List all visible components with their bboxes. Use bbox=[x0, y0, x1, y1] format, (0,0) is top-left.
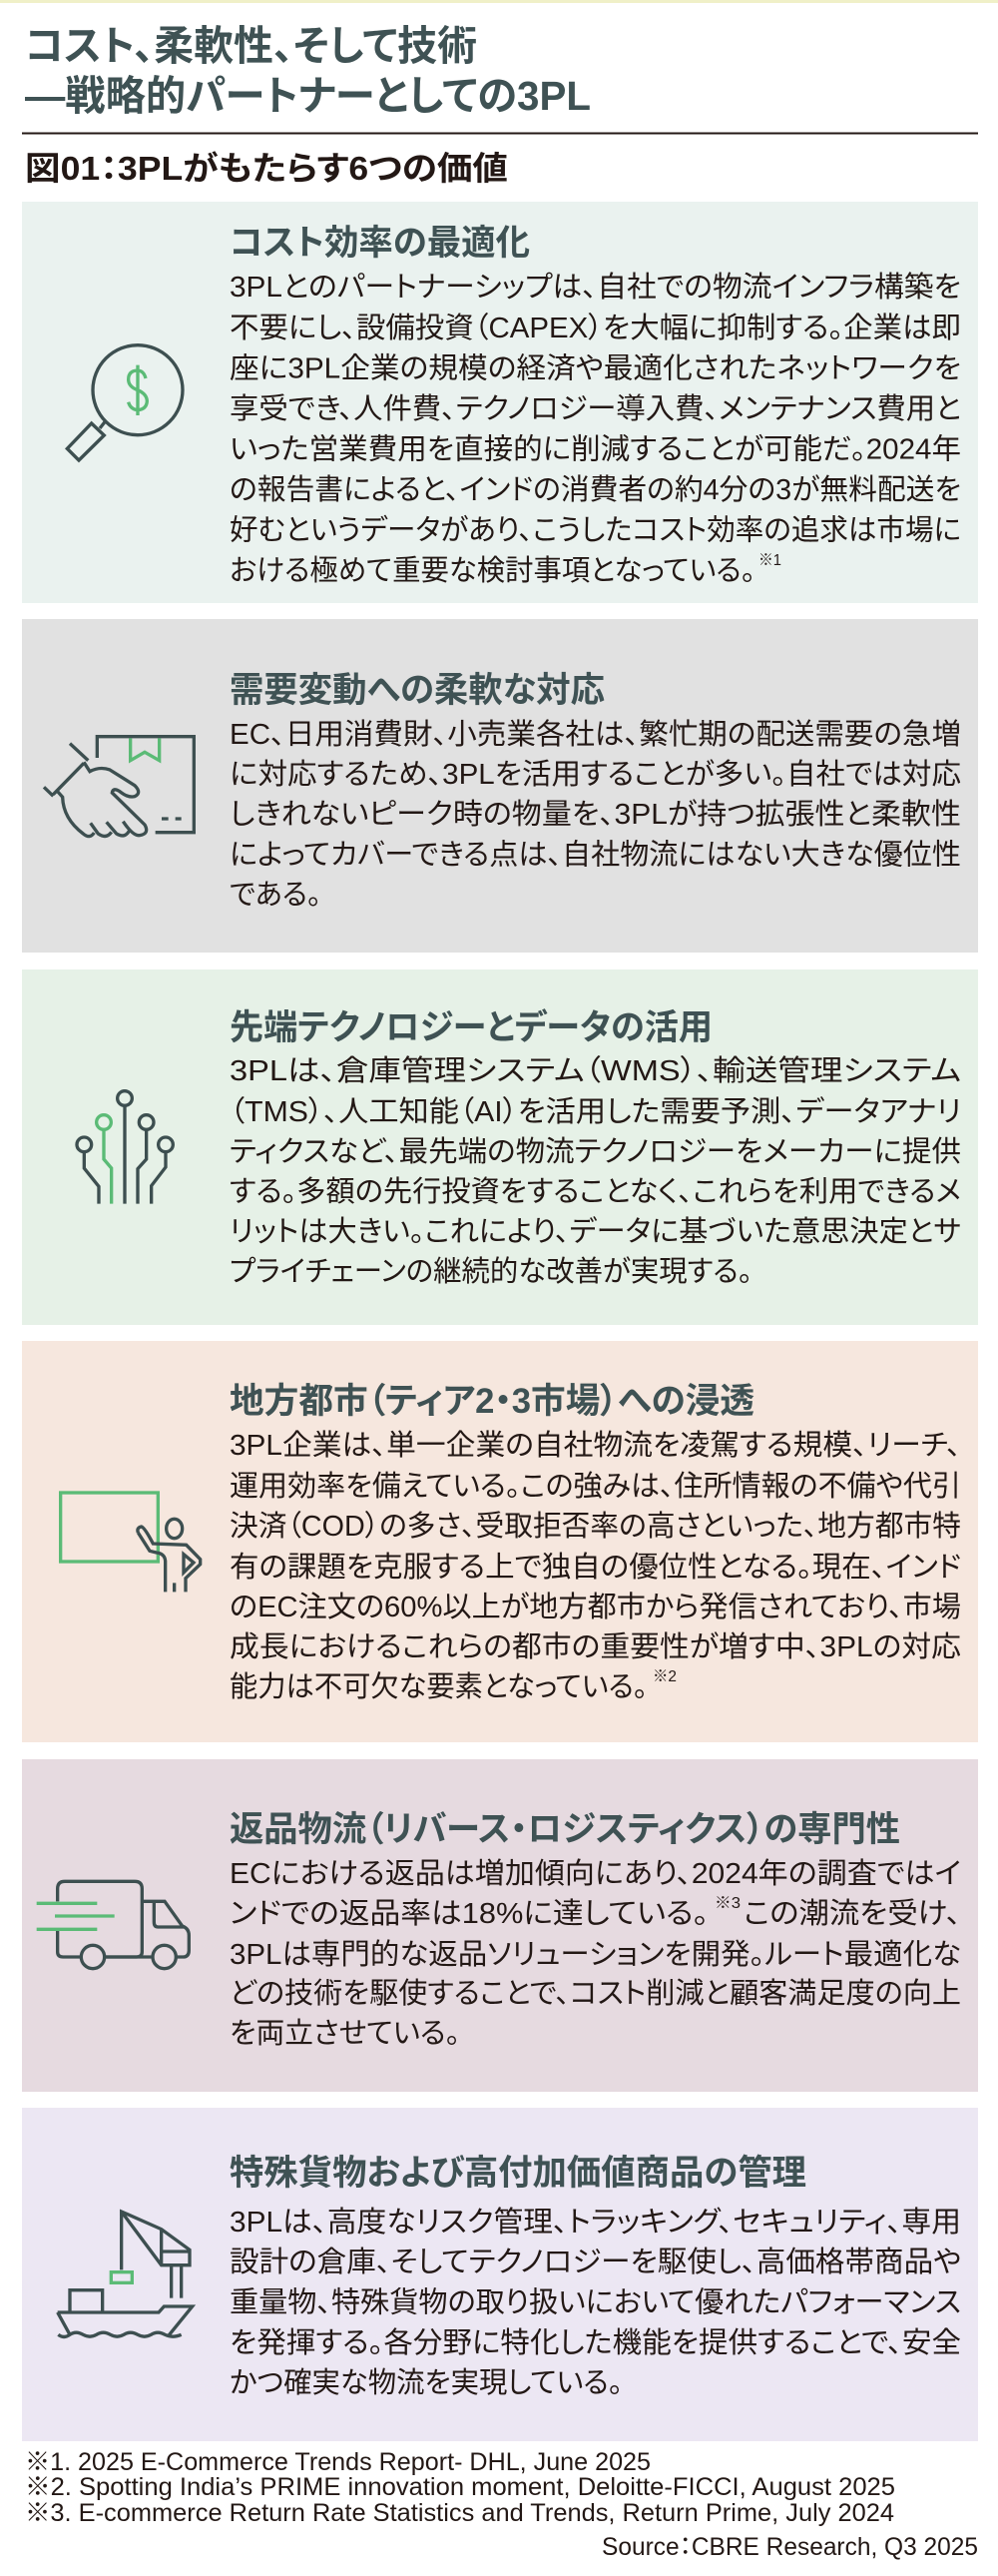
body text: 3PLは、倉庫管理システム（WMS）、輸送管理システム bbox=[230, 1054, 961, 1087]
heading: 先端テクノロジーとデータの活用 bbox=[230, 1007, 713, 1047]
body text: を発揮する。各分野に特化した機能を提供することで、安全 bbox=[230, 2326, 961, 2359]
body text: 享受でき、人件費、テクノロジー導入費、メンテナンス費用と bbox=[230, 392, 961, 425]
body text: この潮流を受け、 bbox=[744, 1897, 961, 1930]
heading: 地方都市（ティア2・3市場）への浸透 bbox=[230, 1382, 754, 1421]
footnotes: ※1. 2025 E-Commerce Trends Report- DHL, June 2025 bbox=[25, 2448, 651, 2476]
heading: 特殊貨物および高付加価値商品の管理 bbox=[230, 2154, 806, 2193]
heading: コスト効率の最適化 bbox=[230, 224, 530, 263]
panel: cost efficiency bbox=[22, 202, 978, 603]
body text: 決済（COD）の多さ、受取拒否率の高さといった、地方都市特 bbox=[230, 1510, 961, 1543]
body text: 成長におけるこれらの都市の重要性が増す中、3PLの対応 bbox=[230, 1630, 961, 1663]
body text bbox=[230, 1054, 961, 1288]
panel: special cargo bbox=[22, 2108, 978, 2441]
body text: EC、日用消費財、小売業各社は、繁忙期の配送需要の急増 bbox=[230, 718, 961, 751]
body text bbox=[230, 1857, 961, 2050]
icon: hand and box bbox=[44, 737, 194, 837]
body text bbox=[230, 2206, 961, 2399]
panel: tier 2 and 3 markets bbox=[22, 1341, 978, 1742]
icon: circuit tree bbox=[77, 1091, 173, 1204]
body text: 不要にし、設備投資（CAPEX）を大幅に抑制する。企業は即 bbox=[230, 312, 961, 344]
body text: である。 bbox=[230, 879, 321, 911]
body text bbox=[230, 271, 961, 587]
body text: 好むというデータがあり、こうしたコスト効率の追求は市場に bbox=[230, 513, 961, 547]
body text: 3PL企業は、単一企業の自社物流を凌駕する規模、リーチ、 bbox=[230, 1429, 961, 1462]
body text: しきれないピーク時の物量を、3PLが持つ拡張性と柔軟性 bbox=[230, 798, 961, 831]
body text: 重量物、特殊貨物の取り扱いにおいて優れたパフォーマンス bbox=[230, 2286, 961, 2318]
body text: 有の課題を克服する上で独自の優位性となる。現在、インド bbox=[230, 1551, 961, 1584]
footnotes: ※2. Spotting India’s PRIME innovation moment, Deloitte-FICCI, August 2025 bbox=[25, 2473, 895, 2501]
title bbox=[25, 23, 591, 119]
title: コスト、柔軟性、そして技術 bbox=[25, 23, 477, 69]
body text: によってカバーできる点は、自社物流にはない大きな優位性 bbox=[230, 839, 961, 871]
icon: presenter at board bbox=[61, 1493, 201, 1592]
body text: 座に3PL企業の規模の経済や最適化されたネットワークを bbox=[230, 351, 961, 385]
body text: ※1 bbox=[758, 552, 781, 569]
footnotes: ※3. E-commerce Return Rate Statistics and Trends, Return Prime, July 2024 bbox=[25, 2499, 894, 2527]
body text: する。多額の先行投資をすることなく、これらを利用できるメ bbox=[230, 1175, 961, 1208]
body text: ※3 bbox=[715, 1895, 741, 1912]
icon: cargo ship and crane bbox=[58, 2212, 193, 2336]
heading: 需要変動への柔軟な対応 bbox=[230, 671, 605, 710]
body text: 能力は不可欠な要素となっている。 bbox=[230, 1670, 648, 1703]
body text: ECにおける返品は増加傾向にあり、2024年の調査ではイ bbox=[230, 1857, 961, 1890]
body text: ンドでの返品率は18%に達している。 bbox=[230, 1897, 709, 1930]
body text: 3PLは、高度なリスク管理、トラッキング、セキュリティ、専用 bbox=[230, 2206, 961, 2239]
figure heading: 図01：3PLがもたらす6つの価値 bbox=[25, 150, 508, 187]
body text: いった営業費用を直接的に削減することが可能だ。2024年 bbox=[230, 433, 961, 465]
icon: magnifier with dollar sign bbox=[67, 345, 183, 460]
body text: 3PLは専門的な返品ソリューションを開発。ルート最適化な bbox=[230, 1938, 961, 1971]
body text: に対応するため、3PLを活用することが多い。自社では対応 bbox=[230, 758, 961, 791]
body text: かつ確実な物流を実現している。 bbox=[230, 2366, 623, 2399]
body text: のEC注文の60%以上が地方都市から発信されており、市場 bbox=[230, 1591, 961, 1623]
body text: 運用効率を備えている。この強みは、住所情報の不備や代引 bbox=[230, 1470, 961, 1503]
body text: ティクスなど、最先端の物流テクノロジーをメーカーに提供 bbox=[230, 1135, 961, 1168]
footnotes bbox=[25, 2448, 895, 2527]
body text: 3PLとのパートナーシップは、自社での物流インフラ構築を bbox=[230, 271, 961, 304]
body text bbox=[230, 718, 961, 911]
body text: を両立させている。 bbox=[230, 2017, 460, 2050]
title: —戦略的パートナーとしての3PL bbox=[25, 73, 591, 119]
source: Source：CBRE Research, Q3 2025 bbox=[602, 2533, 978, 2561]
body text: 設計の倉庫、そしてテクノロジーを駆使し、高価格帯商品や bbox=[230, 2246, 961, 2278]
body text: ※2 bbox=[653, 1668, 677, 1685]
body text: どの技術を駆使することで、コスト削減と顧客満足度の向上 bbox=[230, 1977, 961, 2010]
icon: delivery truck bbox=[37, 1881, 189, 1969]
body text: プライチェーンの継続的な改善が実現する。 bbox=[230, 1255, 752, 1288]
body text: おける極めて重要な検討事項となっている。 bbox=[230, 554, 755, 587]
body text: の報告書によると、インドの消費者の約4分の3が無料配送を bbox=[230, 473, 961, 506]
body text bbox=[230, 1429, 961, 1703]
panel: demand flexibility bbox=[22, 619, 978, 953]
body text: リットは大きい。これにより、データに基づいた意思決定とサ bbox=[230, 1215, 961, 1248]
panel: reverse logistics bbox=[22, 1759, 978, 2092]
panel: technology and data bbox=[22, 969, 978, 1325]
body text: （TMS）、人工知能（AI）を活用した需要予測、データアナリ bbox=[230, 1095, 961, 1128]
heading: 返品物流（リバース・ロジスティクス）の専門性 bbox=[230, 1810, 900, 1849]
